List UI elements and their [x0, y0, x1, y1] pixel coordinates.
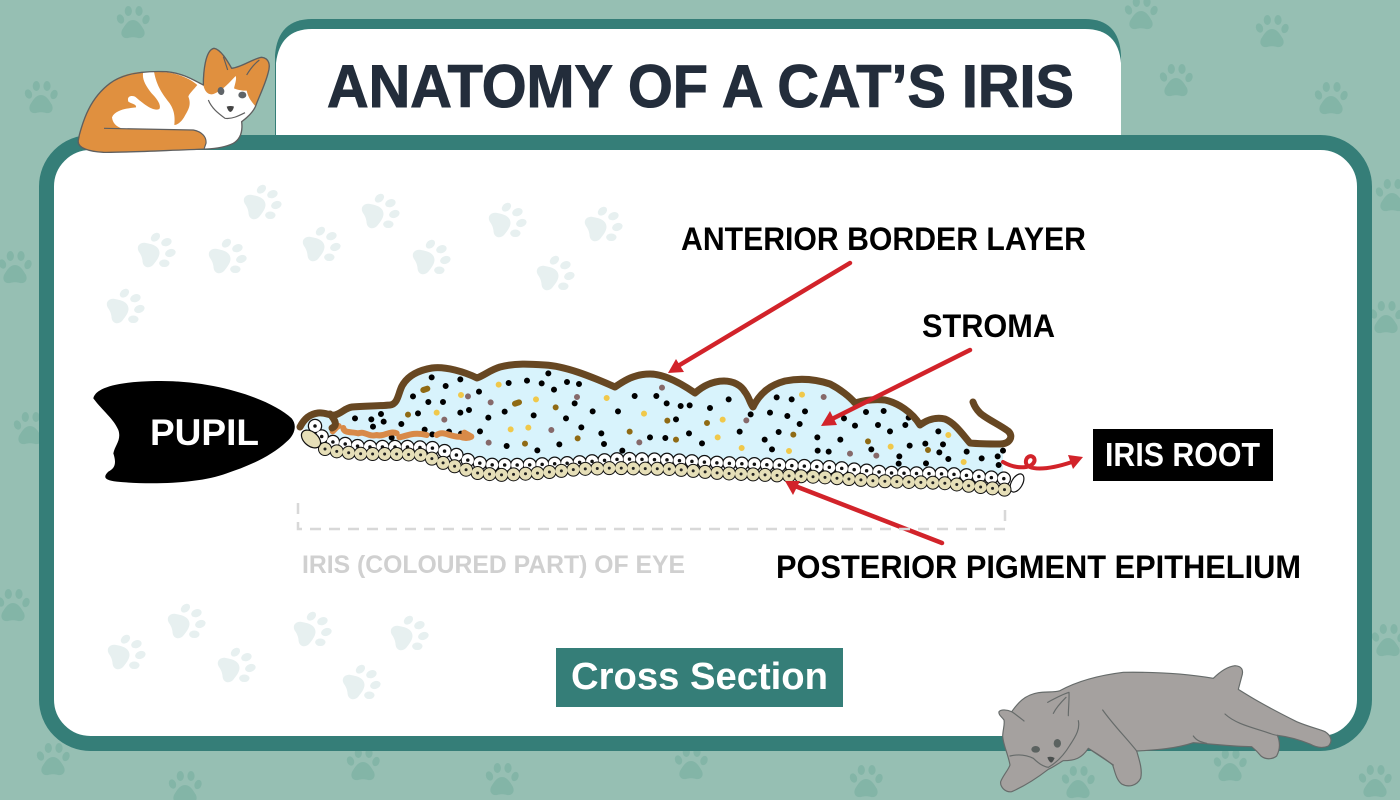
iris pigment cells, beige row: [325, 449, 1008, 490]
title: ANATOMY OF A CAT’S IRIS: [327, 53, 1074, 120]
iris cross-section diagram: [298, 364, 1027, 494]
stroma fill: [300, 364, 1003, 478]
arrow: iris root: [1003, 455, 1083, 469]
label: iris root: IRIS ROOT: [1105, 436, 1260, 473]
label: iris coloured part: IRIS (COLOURED PART) OF EYE: [302, 551, 685, 579]
orange pigment band: [333, 426, 471, 438]
arrow: stroma: [821, 350, 970, 426]
end cell: [1007, 472, 1027, 494]
icon: sleeping grey cat: [999, 666, 1331, 792]
caption: cross section: [556, 648, 843, 707]
title tab: [275, 19, 1121, 140]
main panel: [46, 142, 1364, 744]
icon: orange and white cat: [78, 48, 269, 152]
anterior border layer outline: [300, 364, 1011, 444]
label: posterior pigment epithelium: POSTERIOR PIGMENT EPITHELIUM: [776, 549, 1301, 585]
pupil: [93, 381, 295, 483]
iris pigment cells, white row: [315, 426, 1008, 479]
label: anterior border layer: ANTERIOR BORDER LAYER: [681, 221, 1086, 257]
arrow: anterior border layer: [668, 263, 850, 373]
stroma dots, right half: [662, 388, 1003, 465]
brown hook near pupil: [330, 414, 335, 428]
faint panel paw prints: [103, 179, 627, 707]
pupil label: PUPIL: [150, 412, 259, 453]
label: stroma: STROMA: [922, 308, 1055, 344]
caption: cross section: Cross Section: [571, 656, 828, 698]
label: iris root: [1093, 429, 1273, 481]
stroma dots, left half: [355, 373, 656, 451]
large beige cell by pupil: [298, 427, 324, 451]
arrow: posterior pigment epithelium: [785, 481, 942, 543]
bracket: iris extent: [298, 503, 1005, 529]
